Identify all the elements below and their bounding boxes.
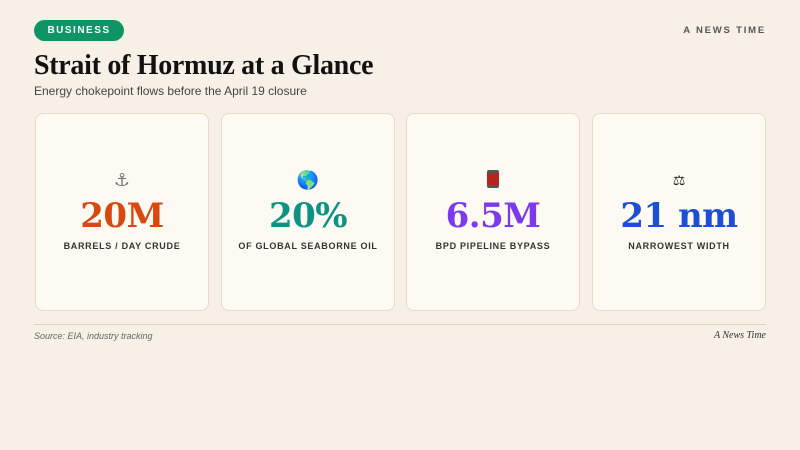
- category pill: [34, 20, 124, 41]
- icon: scales: ⚖: [673, 173, 685, 189]
- card: narrowest width: [592, 113, 766, 311]
- card: pipeline bypass: [406, 113, 580, 311]
- stat: 6.5M: 6.5M: [446, 196, 540, 236]
- footer brand: A News Time: [714, 330, 766, 341]
- icon: globe: 🌎: [297, 170, 319, 191]
- title: Strait of Hormuz at a Glance: [34, 50, 373, 81]
- label: BPD PIPELINE BYPASS: [436, 241, 550, 251]
- icon: anchor: ⚓: [114, 170, 130, 191]
- source note: Source: EIA, industry tracking: [34, 331, 153, 341]
- stat: 21 nm: 21 nm: [620, 196, 738, 236]
- label: NARROWEST WIDTH: [628, 241, 730, 251]
- stat: 20M: 20M: [80, 196, 164, 236]
- stat: 20%: 20%: [269, 196, 347, 236]
- label: OF GLOBAL SEABORNE OIL: [238, 241, 378, 251]
- subtitle: Energy chokepoint flows before the April 19 closure: [34, 84, 307, 98]
- category pill: BUSINESS: [47, 25, 111, 36]
- icon: oil barrel: [487, 170, 499, 188]
- card: global share: [221, 113, 395, 311]
- brand: A NEWS TIME: [683, 25, 766, 36]
- card: crude barrels: [35, 113, 209, 311]
- label: BARRELS / DAY CRUDE: [64, 241, 180, 251]
